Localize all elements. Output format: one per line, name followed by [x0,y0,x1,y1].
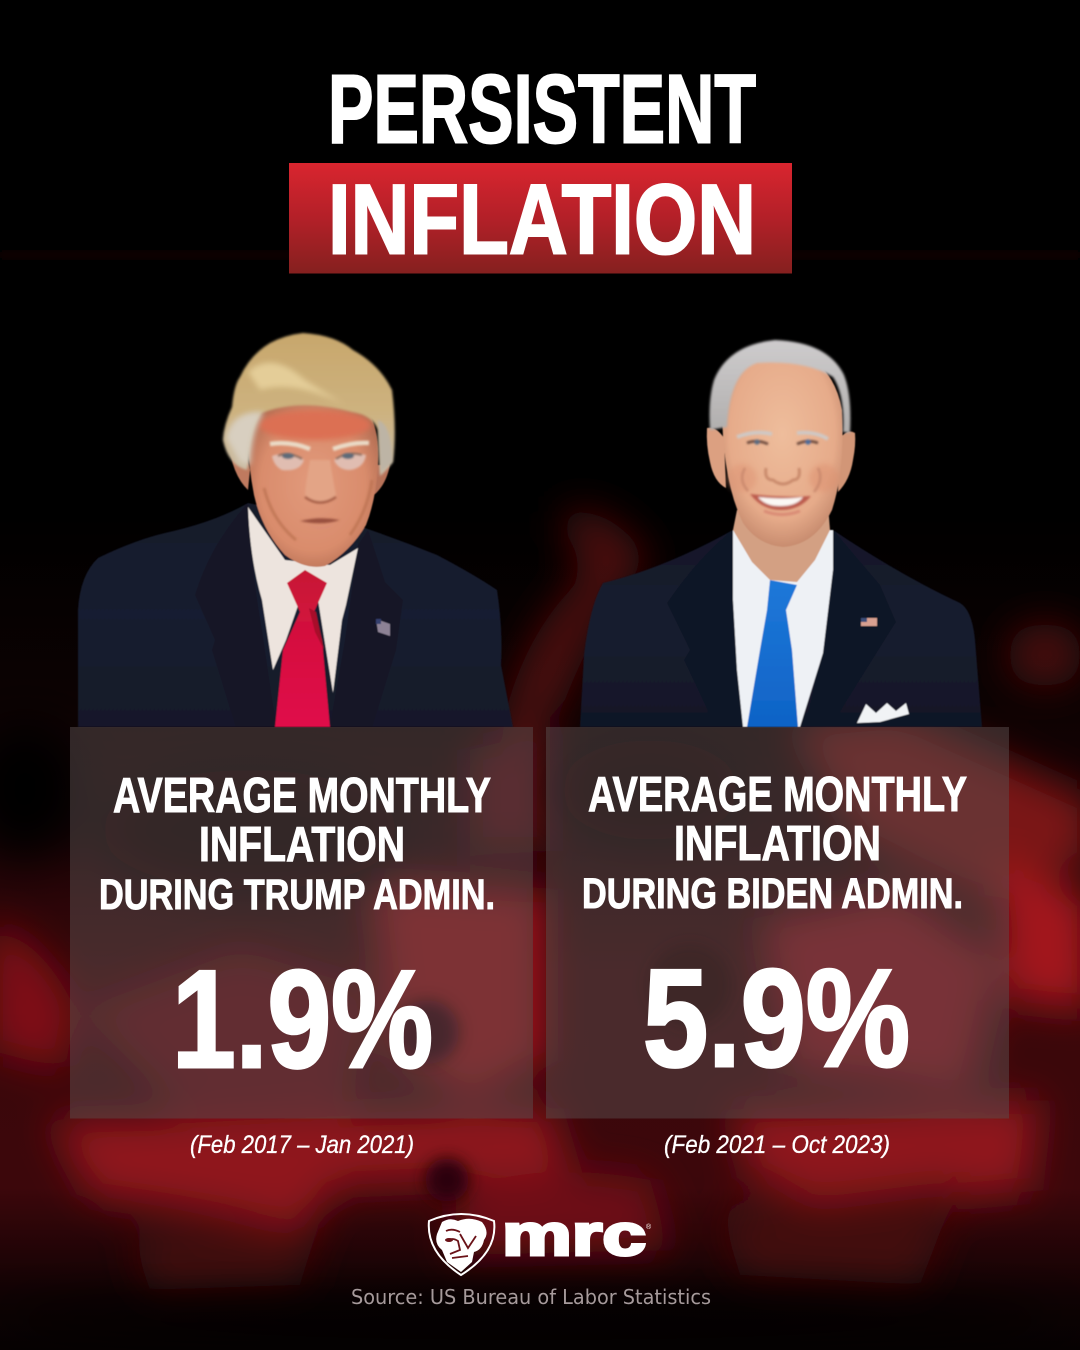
suit: Biden [580,530,982,727]
shirt: Biden [733,530,833,727]
shirt: Trump [248,507,358,693]
heading: Trump panel: DURING TRUMP ADMIN. [99,871,495,919]
wordmark: mrc: mrc [502,1203,646,1268]
face: Biden [722,352,843,547]
ears: Trump [228,440,250,490]
ears: Biden [707,428,726,488]
tie: Trump [275,570,330,727]
date range: Biden: (Feb 2021 – Oct 2023) [664,1131,890,1159]
facial features: Biden [737,433,828,514]
title banner: INFLATION [328,164,756,274]
neck: Biden [733,505,830,582]
registered mark: ® [646,1223,652,1231]
icon: bulldog shield [429,1214,494,1275]
hair: Trump [223,333,395,476]
value: 5.9%: 5.9% [643,941,910,1096]
tie: Biden [747,580,798,727]
panel: Biden admin [546,727,1009,1118]
facial features: Trump [264,443,372,540]
heading: Biden panel: INFLATION [674,817,881,871]
heading: Biden panel [582,768,967,918]
title [289,54,792,274]
heading: Trump panel [99,769,495,919]
value: 1.9%: 1.9% [172,942,433,1097]
flag pin: Biden [861,618,877,626]
lapels: Biden [667,530,745,727]
lapels: Trump [195,503,276,727]
heading: Biden panel: AVERAGE MONTHLY [588,768,967,822]
portrait: Biden [580,340,982,727]
title: PERSISTENT [328,54,756,164]
panel: Trump admin [70,727,533,1118]
heading: Trump panel: AVERAGE MONTHLY [113,769,491,823]
flag pin: Trump [376,619,390,636]
pocket square: Biden [857,703,909,723]
forehead tint: Trump [259,410,371,440]
portrait: Trump [78,333,513,727]
heading: Biden panel: DURING BIDEN ADMIN. [582,870,963,918]
face: Trump [248,403,378,567]
hair: Biden [710,340,850,433]
logo: MRC [429,1203,652,1275]
source line: Source: US Bureau of Labor Statistics [351,1285,711,1309]
heading: Trump panel: INFLATION [199,818,405,872]
cheeks: Biden [727,464,839,492]
date range: Trump: (Feb 2017 – Jan 2021) [190,1131,414,1159]
suit: Trump [78,503,513,727]
